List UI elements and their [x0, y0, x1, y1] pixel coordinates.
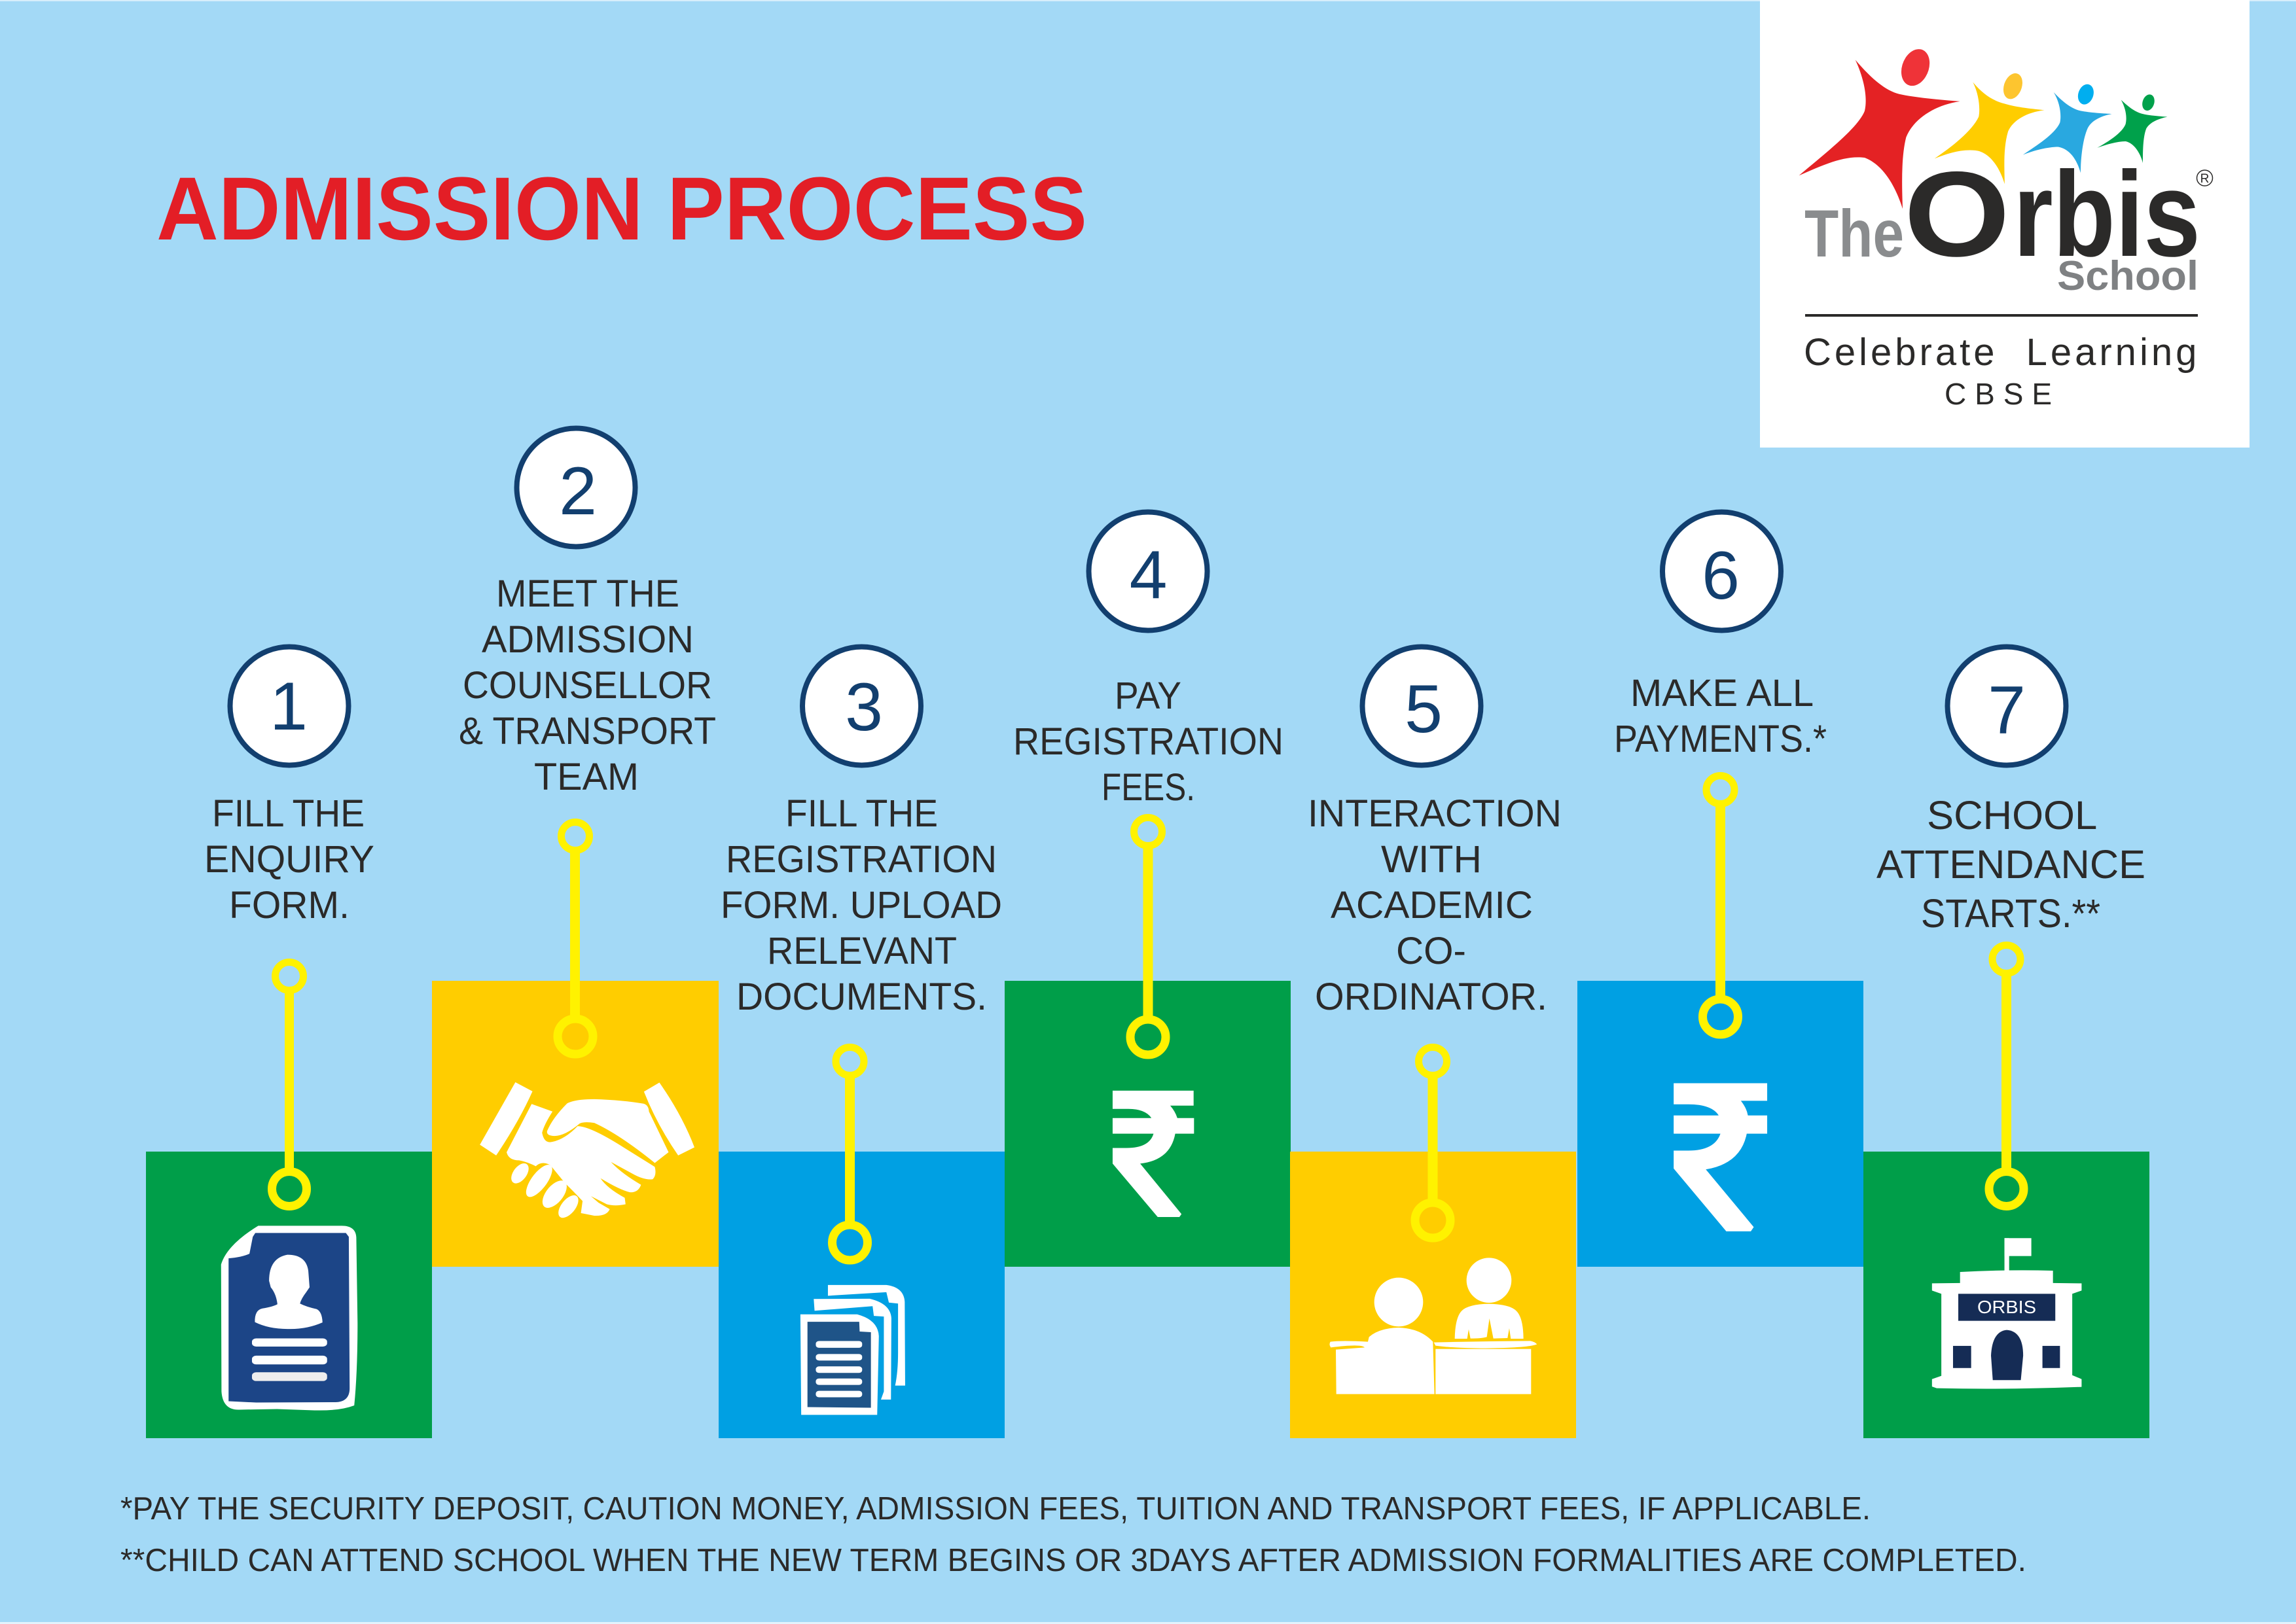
step 1 square — [146, 1152, 432, 1438]
label 6: PAYMENTS.* — [1614, 718, 1827, 760]
connector 6 — [1703, 776, 1738, 1034]
number badge 4: 4 — [1130, 537, 1167, 613]
step 6: make all payments — [1577, 512, 1863, 1267]
label 2: TEAM — [534, 756, 639, 798]
logo: four jumping figures — [1799, 46, 2167, 209]
step 3 square — [719, 1152, 1005, 1438]
label 6: MAKE ALL — [1630, 672, 1813, 715]
connector 2 — [558, 822, 593, 1054]
number badge 7: 7 — [1988, 673, 2026, 749]
label 3: REGISTRATION — [726, 838, 997, 881]
connector 3 — [833, 1047, 868, 1260]
title: ADMISSION PROCESS — [156, 159, 1087, 259]
label 5: ACADEMIC — [1331, 884, 1533, 927]
icon: rupee — [1674, 1083, 1767, 1231]
label 7: ATTENDANCE — [1876, 842, 2145, 887]
step 2 square — [432, 981, 719, 1267]
number badge 3: 3 — [845, 669, 883, 745]
label 7: SCHOOL — [1927, 793, 2096, 838]
connector 4 — [1130, 818, 1166, 1055]
logo tagline: Celebrate Learning — [1804, 331, 2200, 374]
number badge 7 — [1948, 646, 2066, 766]
footnote 2: **CHILD CAN ATTEND SCHOOL WHEN THE NEW TERM BEGINS OR 3DAYS AFTER ADMISSION FORMALITIES ARE COMPLETED. — [120, 1543, 2026, 1578]
logo wordmark: Orbis: O — [1904, 147, 2010, 282]
connector 1 — [272, 962, 306, 1207]
step 2: meet the admission counsellor — [432, 428, 726, 1267]
label 7: STARTS.** — [1921, 891, 2100, 936]
label 1: FILL THE — [212, 792, 365, 835]
registered mark — [2197, 170, 2212, 186]
step 5: interaction with academic co-ordinator — [1290, 646, 1576, 1438]
label 4: PAY — [1115, 675, 1181, 717]
number badge 6 — [1662, 512, 1781, 631]
panel: school logo — [1760, 0, 2250, 448]
logo wordmark: School: School — [2057, 253, 2198, 299]
label 2: ADMISSION — [482, 618, 694, 661]
icon: ID form — [221, 1226, 357, 1411]
number badge 5 — [1363, 646, 1480, 766]
label 2: & TRANSPORT — [459, 710, 716, 752]
school sign text: ORBIS — [1977, 1297, 2036, 1317]
number badge 2: 2 — [559, 453, 597, 529]
step 1: fill the enquiry form — [146, 646, 432, 1438]
registered mark: R — [2200, 172, 2209, 186]
number badge 1 — [230, 646, 348, 766]
label 4: REGISTRATION — [1013, 720, 1283, 763]
logo wordmark: Orbis: rbis — [2013, 147, 2200, 282]
label 1: FORM. — [229, 884, 350, 927]
label 3: FORM. UPLOAD — [721, 884, 1002, 927]
label 3: RELEVANT — [767, 930, 957, 972]
label 4: FEES. — [1102, 766, 1195, 809]
step 4 square — [1005, 981, 1291, 1267]
step 7: school attendance starts — [1863, 646, 2157, 1438]
icon: school building — [1932, 1238, 2081, 1389]
icon: interview at desk — [1329, 1258, 1537, 1394]
number badge 5: 5 — [1405, 671, 1443, 747]
label 2: COUNSELLOR — [463, 664, 712, 707]
number badge 3 — [802, 646, 921, 766]
footnote 1: *PAY THE SECURITY DEPOSIT, CAUTION MONEY, ADMISSION FEES, TUITION AND TRANSPORT FEES, IF APPLICABLE. — [120, 1491, 1871, 1527]
connector 7 — [1989, 945, 2024, 1207]
number badge 1: 1 — [270, 669, 308, 745]
step 4: pay registration fees — [1005, 512, 1294, 1267]
label 5: CO- — [1396, 930, 1466, 972]
number badge 6: 6 — [1702, 538, 1740, 614]
step 7 square — [1863, 1152, 2149, 1438]
connector 5 — [1415, 1047, 1450, 1238]
label 1: ENQUIRY — [204, 838, 374, 881]
label 5: WITH — [1381, 838, 1482, 881]
label 3: DOCUMENTS. — [736, 976, 987, 1018]
logo board: CBSE: CBSE — [1945, 377, 2052, 411]
step 5 square — [1290, 1152, 1576, 1438]
icon: rupee — [1113, 1091, 1194, 1217]
label 5: ORDINATOR. — [1315, 976, 1547, 1018]
step 6 square — [1577, 981, 1863, 1267]
icon: document stack — [800, 1285, 905, 1415]
logo wordmark: The: The — [1804, 196, 1904, 271]
icon: handshake — [480, 1082, 694, 1220]
number badge 4 — [1089, 512, 1207, 631]
label 3: FILL THE — [785, 792, 938, 835]
step 3: fill the registration form — [719, 646, 1013, 1438]
label 5: INTERACTION — [1308, 792, 1562, 835]
label 2: MEET THE — [496, 573, 679, 615]
number badge 2 — [517, 428, 635, 547]
